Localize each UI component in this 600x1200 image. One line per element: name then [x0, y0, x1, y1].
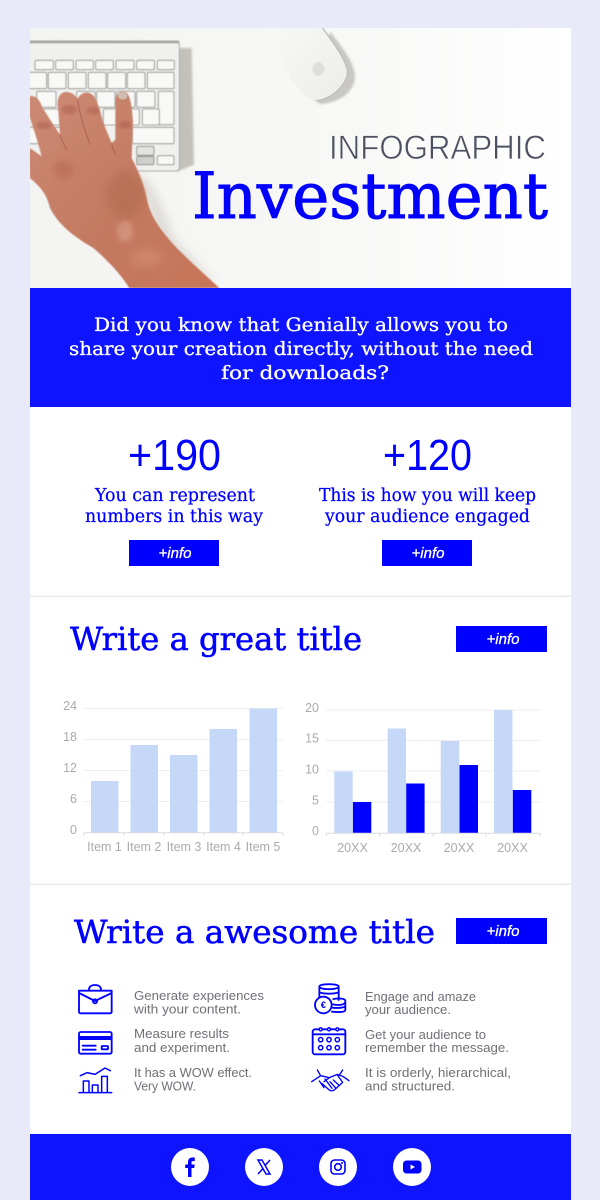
bar chart: items: Item 1	[87, 840, 122, 854]
stat: +120: +120	[383, 431, 472, 480]
keyboard	[23, 41, 179, 171]
banner text: Did you know that Genially allows you to	[94, 314, 508, 336]
stat caption	[85, 486, 263, 527]
list item: generate experiences: Generate experiences	[134, 989, 264, 1003]
list item: wow effect: Very WOW.	[134, 1080, 196, 1094]
intro banner	[30, 288, 571, 407]
list item: measure results: Measure results	[134, 1027, 229, 1041]
icon: credit card	[79, 1032, 112, 1054]
bar chart: items: 6	[70, 792, 77, 806]
stat: +190	[85, 431, 263, 566]
stat caption: your audience engaged	[324, 507, 530, 527]
button: +info: +info	[487, 631, 519, 648]
stat caption: This is how you will keep	[319, 486, 536, 506]
list item: get your audience: Get your audience to	[365, 1028, 486, 1042]
grouped bar chart: 20XX: 15	[305, 732, 319, 746]
icon: X	[245, 1148, 283, 1186]
list item: engage: Engage and amaze	[365, 990, 476, 1004]
bar chart: items	[63, 699, 283, 854]
bar chart: items: Item 5	[246, 840, 280, 854]
section heading: Write a awesome title: Write a awesome title	[74, 913, 435, 951]
banner text	[69, 314, 533, 384]
bar chart: items: 24	[63, 699, 77, 713]
bar chart: items: Item 2	[127, 840, 161, 854]
banner text: for downloads?	[221, 362, 389, 384]
button: +info	[382, 540, 472, 566]
list item: engage	[365, 990, 476, 1017]
list item: get your audience: remember the message.	[365, 1041, 509, 1055]
icon: euro coins	[315, 984, 345, 1013]
grouped bar chart: 20XX: 0	[312, 824, 319, 838]
button: +info	[456, 626, 547, 652]
bar chart: items: Item 3	[167, 840, 201, 854]
icon: briefcase	[79, 985, 112, 1013]
icon: youtube	[393, 1148, 431, 1186]
bar chart: items: 12	[63, 761, 77, 775]
icon: handshake	[312, 1070, 349, 1091]
grouped bar chart: 20XX: 20XX	[391, 841, 422, 855]
list item: orderly: It is orderly, hierarchical,	[365, 1066, 511, 1080]
bar chart: items: Item 4	[206, 840, 241, 854]
bar chart: items: 0	[70, 823, 77, 837]
bar chart: items: 18	[63, 730, 77, 744]
button: +info: +info	[159, 545, 191, 562]
hero panel	[30, 28, 358, 288]
grouped bar chart: 20XX: 5	[312, 794, 319, 808]
button: +info	[129, 540, 219, 566]
list item: measure results: and experiment.	[134, 1041, 230, 1055]
hand	[28, 92, 219, 288]
grouped bar chart: 20XX: 20	[305, 701, 319, 715]
list item: orderly	[365, 1066, 511, 1094]
list item: orderly: and structured.	[365, 1080, 455, 1094]
list item: generate experiences: with your content.	[133, 1002, 241, 1016]
list item: wow effect: It has a WOW effect.	[134, 1066, 252, 1080]
stat: +120	[319, 431, 536, 566]
icon: euro coins: €	[321, 1000, 327, 1010]
banner text: share your creation directly, without the need	[69, 338, 533, 360]
heading: Investment: Investment	[192, 160, 548, 234]
photo: hand on keyboard with mouse	[23, 28, 355, 288]
mouse	[306, 28, 356, 105]
grouped bar chart: 20XX: 10	[305, 762, 319, 776]
heading: INFOGRAPHIC: INFOGRAPHIC	[329, 129, 546, 167]
arm shadow	[143, 180, 211, 278]
list item: measure results	[134, 1027, 230, 1055]
grouped bar chart: 20XX: 20XX	[497, 841, 528, 855]
stat caption: numbers in this way	[85, 507, 263, 527]
footer bar	[30, 1134, 571, 1200]
list item: get your audience	[365, 1028, 509, 1055]
stat caption: You can represent	[94, 486, 255, 506]
stat caption	[319, 486, 536, 527]
grouped bar chart: 20XX	[305, 701, 540, 855]
icon: calendar	[313, 1028, 345, 1054]
keyboard shadow	[177, 48, 194, 172]
list item: wow effect	[134, 1066, 252, 1094]
grouped bar chart: 20XX: 20XX	[444, 841, 475, 855]
list item: generate experiences	[133, 989, 264, 1016]
icon: facebook	[171, 1148, 209, 1186]
section heading: Write a great title: Write a great title	[70, 620, 362, 658]
grouped bar chart: 20XX: 20XX	[337, 841, 368, 855]
stat: +190: +190	[128, 431, 221, 480]
button: +info: +info	[487, 923, 519, 940]
icon: instagram	[319, 1148, 357, 1186]
button: +info: +info	[412, 545, 444, 562]
list item: engage: your audience.	[365, 1003, 451, 1017]
icon: growth chart	[79, 1068, 112, 1093]
button: +info	[456, 918, 547, 944]
